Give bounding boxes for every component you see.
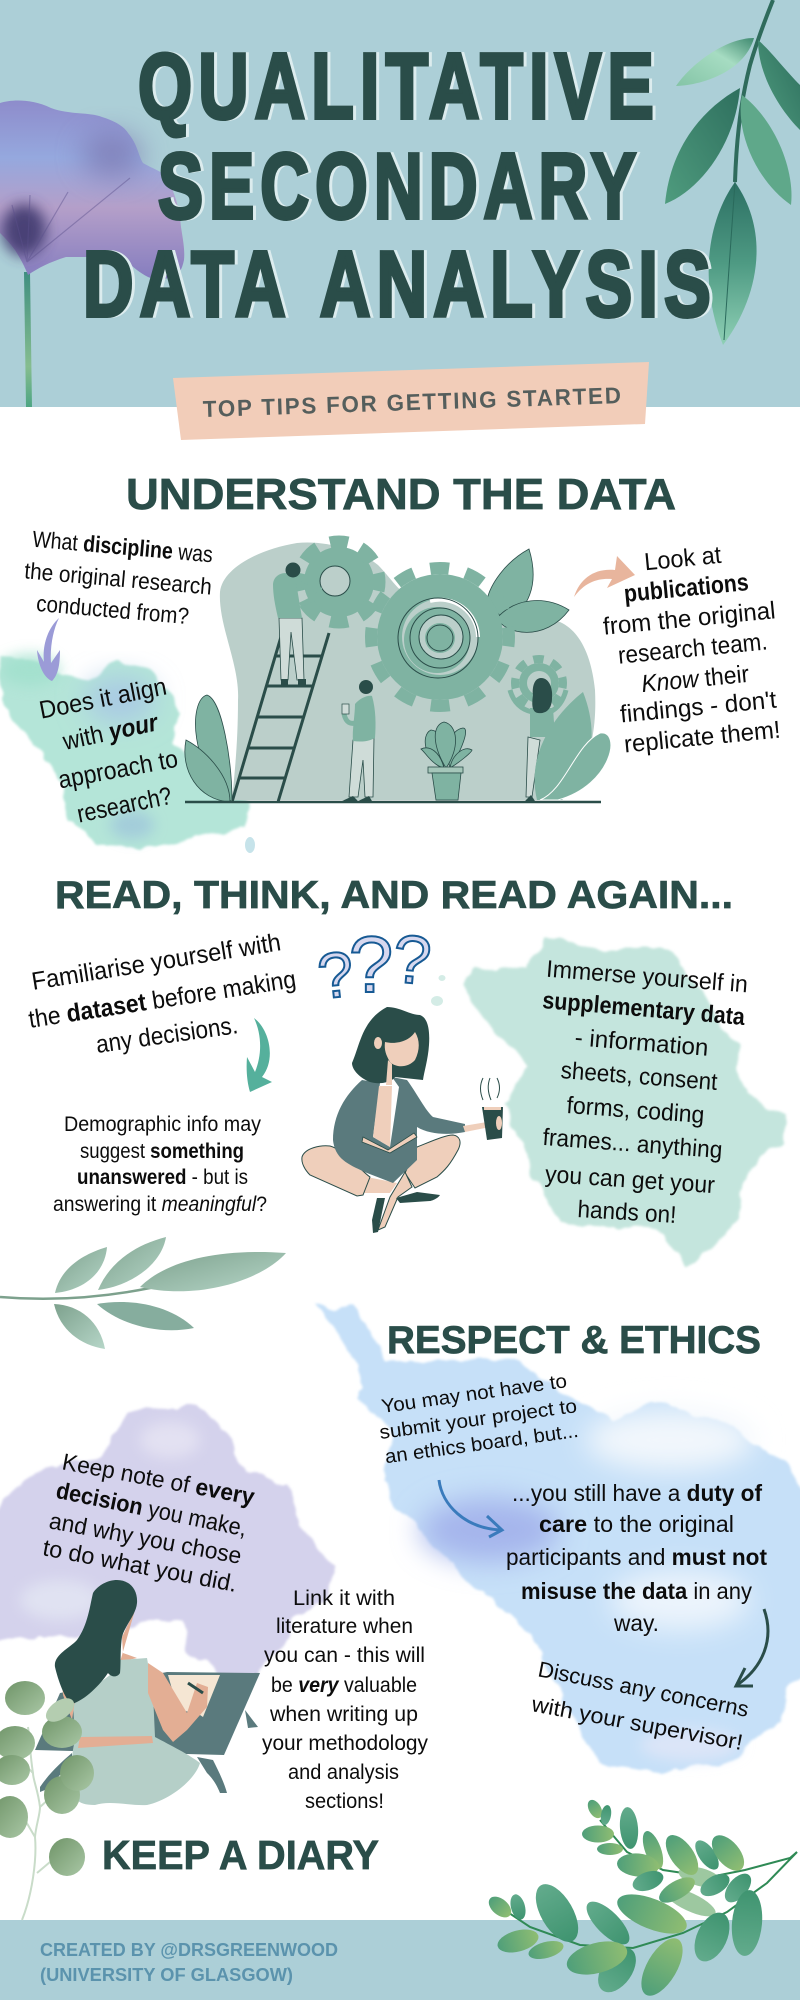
text: immerse yourself: you can get your — [544, 1161, 716, 1199]
legs — [302, 1135, 460, 1196]
icon: sage leaf sprig — [0, 1237, 286, 1349]
illustration backdrop — [220, 542, 595, 800]
icon: eucalyptus branch — [0, 1681, 94, 1920]
right arm — [148, 1663, 208, 1742]
text: immerse yourself: sheets, consent — [560, 1057, 719, 1096]
footer background band — [0, 1920, 800, 2000]
heading: read think read again: READ, THINK, AND READ AGAIN... — [55, 874, 733, 917]
arrow: teal curved down — [247, 1018, 272, 1092]
text: keep note: decision you make, — [54, 1477, 249, 1541]
text: duty of care: care to the original — [539, 1511, 734, 1537]
ground line — [185, 801, 601, 803]
text: look at publications: Know their — [640, 661, 750, 698]
text: duty of care — [506, 1480, 767, 1636]
person on ladder — [273, 562, 322, 685]
text: look at publications: replicate them! — [623, 717, 782, 758]
arrow: blue curved right — [439, 1480, 502, 1537]
text: immerse yourself: frames... anything — [542, 1124, 723, 1164]
open book — [362, 1133, 417, 1153]
desk legs — [40, 1710, 258, 1793]
text: keep note: and why you chose — [47, 1507, 244, 1569]
icon: hanging leaves top right — [665, 0, 800, 345]
notebook — [168, 1675, 220, 1717]
text: does it align: Does it align — [37, 673, 169, 725]
potted plant — [421, 722, 472, 800]
text: familiarise: any decisions. — [94, 1011, 240, 1059]
hand and cup — [463, 1078, 503, 1140]
left plant — [185, 695, 232, 802]
text: demographic info: Demographic info may — [64, 1112, 261, 1136]
text: keep note — [41, 1448, 257, 1597]
text: link with literature: and analysis — [288, 1760, 399, 1784]
leaves behind gear — [487, 549, 569, 632]
text: what discipline: What discipline was — [31, 526, 214, 567]
text: look at publications: from the original — [602, 597, 777, 641]
text: duty of care: participants and must not — [506, 1544, 767, 1570]
icon: question marks: ? — [349, 920, 393, 1009]
watercolour blob: green left — [0, 654, 255, 853]
hair and face — [352, 1007, 429, 1085]
illustration: people working on gears — [185, 542, 611, 802]
footer credit — [40, 1939, 338, 1985]
gear: small — [515, 659, 563, 707]
gear: medium — [300, 543, 378, 621]
text: duty of care: ...you still have a duty of — [512, 1480, 762, 1506]
text: discuss concerns: with your supervisor! — [529, 1691, 745, 1755]
ladder — [232, 630, 329, 802]
text: what discipline: conducted from? — [35, 590, 190, 629]
text: what discipline: the original research — [23, 557, 213, 600]
arrow: peach curved right — [574, 556, 635, 597]
text: look at publications: research team. — [617, 628, 769, 670]
text: look at publications: Look at — [643, 542, 723, 576]
text: link with literature: be very valuable — [271, 1673, 417, 1697]
text: discuss concerns: Discuss any concerns — [536, 1656, 751, 1722]
text: familiarise: the dataset before making — [27, 965, 298, 1034]
heading: respect and ethics: RESPECT & ETHICS — [387, 1319, 761, 1362]
text: immerse yourself: hands on! — [577, 1196, 677, 1229]
icon: question marks — [314, 920, 446, 1013]
chest — [373, 1086, 392, 1147]
pen — [188, 1683, 203, 1693]
desk top — [35, 1672, 260, 1755]
watercolour blob: blue — [316, 1304, 800, 1775]
person with small gear — [510, 678, 566, 801]
text: does it align: with your — [60, 708, 161, 756]
arrow: purple curved down — [37, 618, 60, 681]
watercolour blob: mint right — [462, 937, 786, 1267]
text: immerse yourself — [541, 956, 749, 1229]
text: link with literature: when writing up — [269, 1702, 418, 1726]
text: immerse yourself: - information — [574, 1024, 709, 1062]
illustration: woman reading with coffee — [302, 1007, 503, 1233]
text: immerse yourself: supplementary data — [541, 987, 746, 1031]
watercolour blob: purple — [0, 1403, 334, 1680]
text: link with literature: your methodology — [262, 1731, 428, 1755]
text: ethics board: You may not have to — [380, 1370, 568, 1418]
text: demographic info: suggest something — [80, 1139, 244, 1163]
text: ethics board — [378, 1370, 580, 1468]
illustration: woman writing at desk — [35, 1580, 260, 1805]
belt — [78, 1736, 153, 1748]
footer credit: CREATED BY @DRSGREENWOOD — [40, 1939, 338, 1960]
text: duty of care: misuse the data in any — [521, 1578, 752, 1604]
tape banner: top tips: TOP TIPS FOR GETTING STARTED — [202, 382, 623, 422]
text: link with literature: you can - this will — [264, 1643, 425, 1667]
text: does it align — [37, 673, 180, 828]
cardigan — [333, 1077, 465, 1183]
text: demographic info: answering it meaningful? — [53, 1192, 267, 1216]
gear: large — [371, 568, 509, 706]
text: keep note: to do what you did. — [41, 1534, 239, 1597]
text: familiarise: Familiarise yourself with — [30, 928, 283, 996]
title — [83, 34, 717, 336]
text: link with literature: literature when — [276, 1614, 413, 1638]
text: ethics board: submit your project to — [378, 1395, 578, 1444]
text: immerse yourself: Immerse yourself in — [545, 956, 749, 998]
text: ethics board: an ethics board, but... — [384, 1420, 580, 1468]
heading: keep a diary: KEEP A DIARY — [102, 1832, 379, 1878]
text: keep note: Keep note of every — [60, 1448, 257, 1510]
text: what discipline — [23, 526, 214, 629]
heading: understand the data: UNDERSTAND THE DATA — [126, 470, 676, 519]
arrow: dark curved down — [736, 1609, 768, 1686]
text: look at publications — [602, 542, 782, 758]
text: demographic info: unanswered - but is — [77, 1165, 248, 1189]
icon: purple watercolour flower — [0, 101, 184, 407]
left arm — [61, 1673, 75, 1720]
tape banner: top tips — [173, 362, 649, 440]
neck — [120, 1610, 137, 1662]
text: duty of care: way. — [613, 1610, 659, 1636]
text: immerse yourself: forms, coding — [566, 1092, 705, 1129]
icon: question marks: ? — [314, 937, 357, 1013]
text: link with literature: Link it with — [293, 1586, 395, 1610]
text: demographic info — [53, 1112, 267, 1216]
text: look at publications: findings - don't — [619, 687, 778, 728]
text: link with literature: sections! — [305, 1789, 384, 1813]
text: familiarise — [27, 928, 298, 1059]
text: discuss concerns — [529, 1656, 751, 1755]
text: does it align: approach to — [56, 745, 180, 794]
person with phone — [342, 680, 376, 801]
text: look at publications: publications — [623, 569, 750, 608]
icon: question marks: ? — [390, 921, 434, 1000]
icon: green branch bottom right — [485, 1797, 797, 2000]
right plant — [535, 692, 611, 800]
hair — [55, 1580, 137, 1704]
text: link with literature — [262, 1586, 428, 1813]
header background band — [0, 0, 800, 407]
dress — [71, 1658, 200, 1805]
text: does it align: research? — [75, 782, 174, 828]
footer credit: (UNIVERSITY OF GLASGOW) — [40, 1964, 293, 1985]
crossed shin and shoes — [372, 1172, 440, 1233]
